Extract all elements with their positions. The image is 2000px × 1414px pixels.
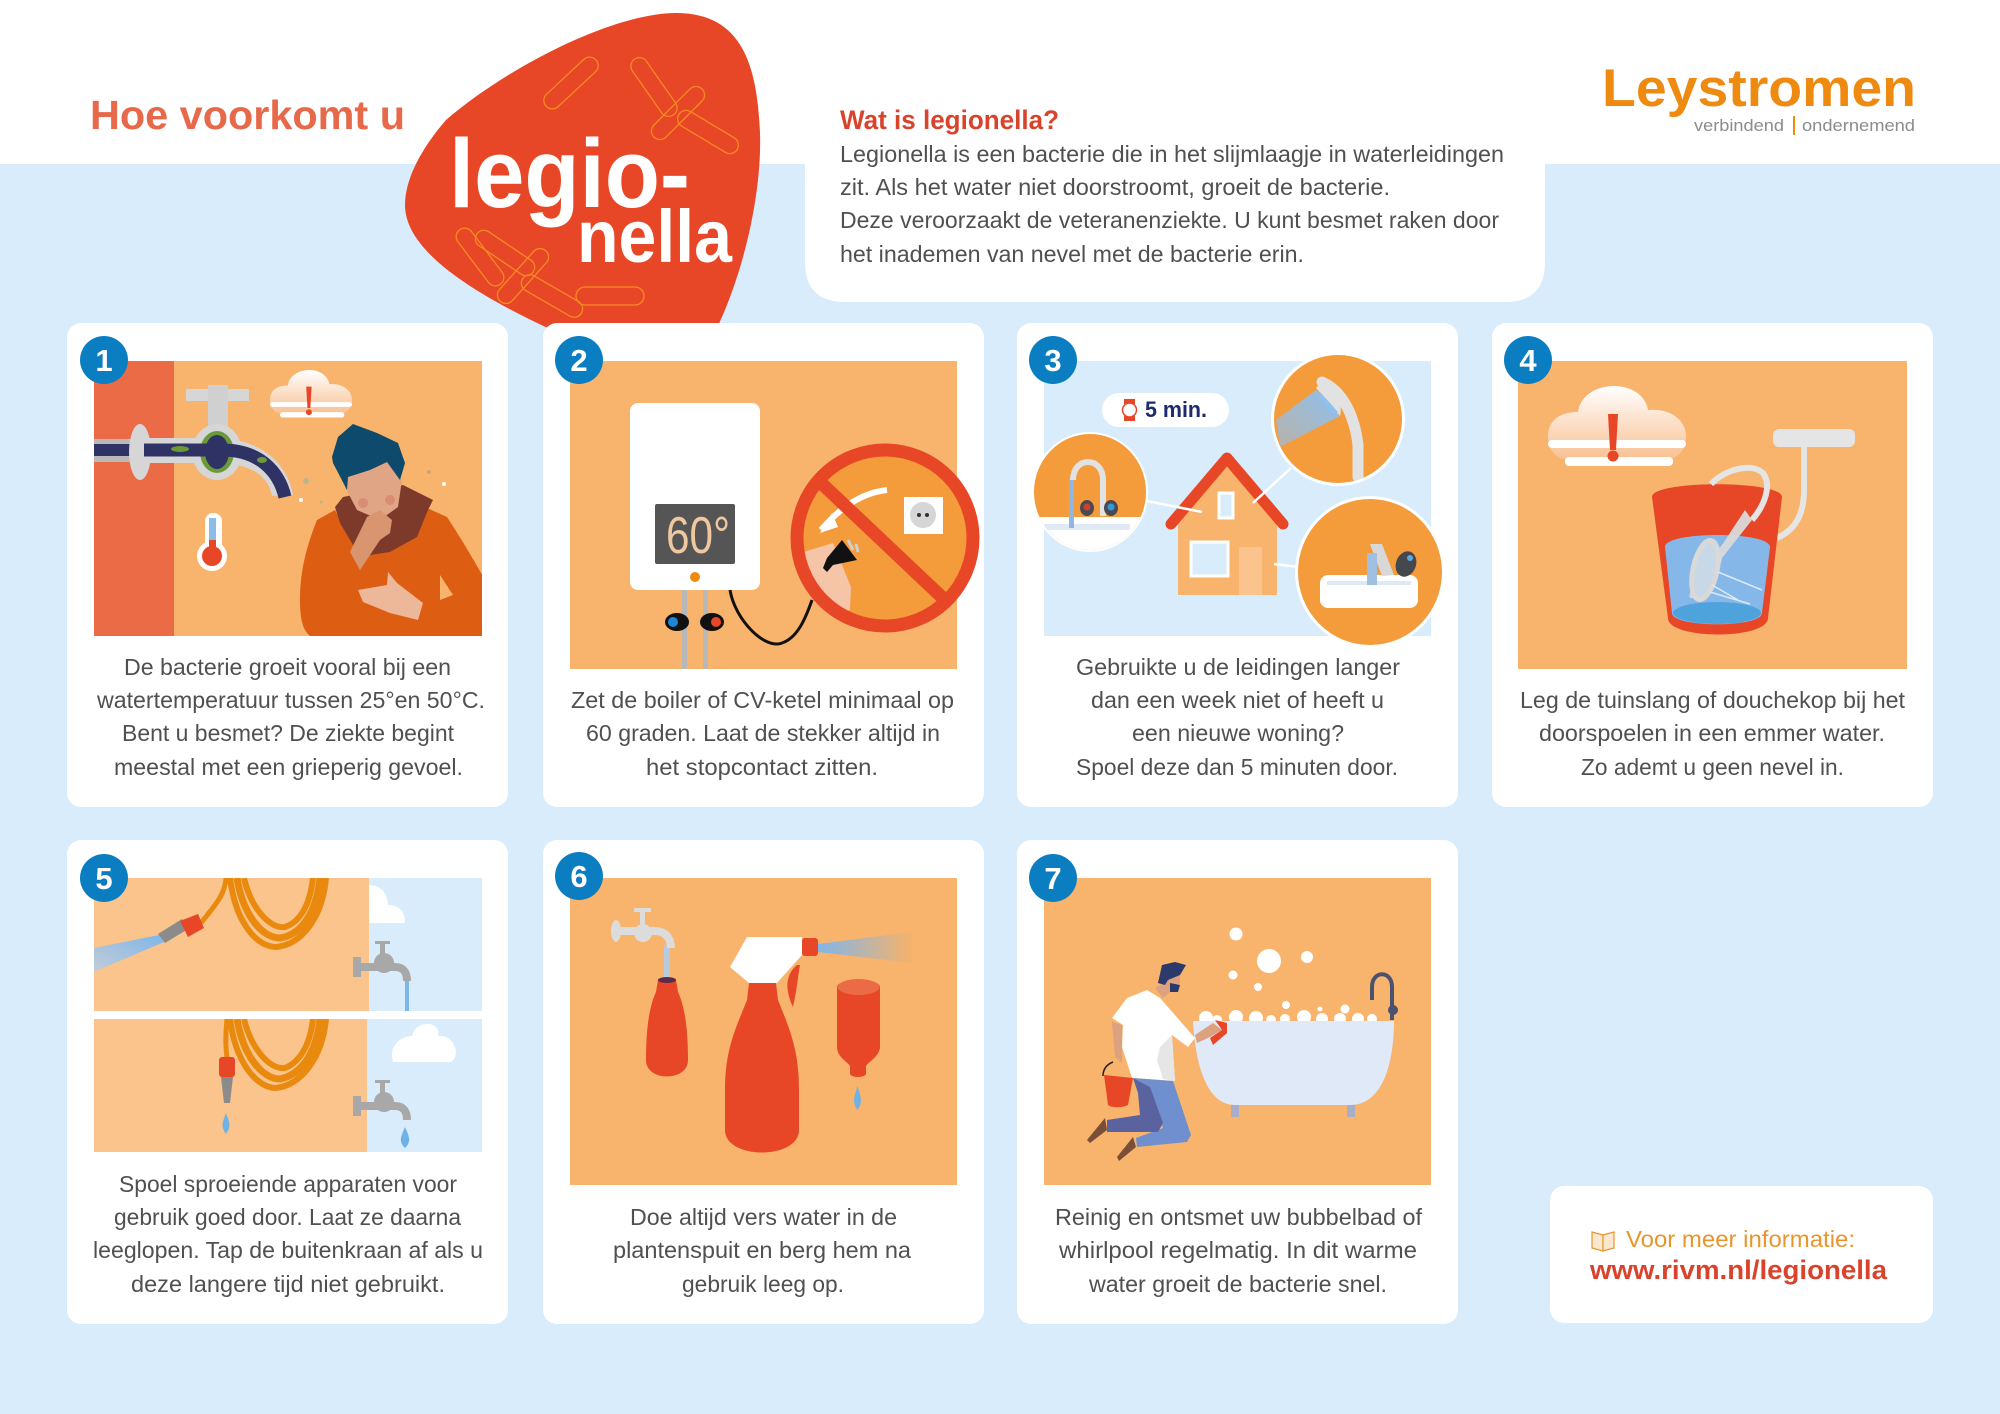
title: Hoe voorkomt u: Hoe voorkomt u bbox=[90, 92, 405, 138]
title blob: legionella: legio- bbox=[449, 119, 690, 228]
text: step 6: Doe altijd vers water in de bbox=[630, 1204, 897, 1230]
intro panel: Wat is legionella: Legionella is een bacterie die in het slijmlaagje in waterleidingen bbox=[840, 141, 1504, 167]
text: step 2: het stopcontact zitten. bbox=[646, 754, 878, 780]
intro panel: Wat is legionella: zit. Als het water niet doorstroomt, groeit de bacterie. bbox=[840, 174, 1390, 200]
text: step 1: watertemperatuur tussen 25°en 50°C. bbox=[96, 687, 485, 713]
text: step 4: Zo ademt u geen nevel in. bbox=[1581, 754, 1844, 780]
number badge 1 bbox=[80, 336, 128, 384]
panel: step 6 bbox=[543, 840, 984, 1324]
number badge 7: 7 bbox=[1044, 861, 1062, 896]
text: step 3: Gebruikte u de leidingen langer bbox=[1076, 654, 1400, 680]
panel: step 2 bbox=[543, 323, 984, 807]
number badge 6: 6 bbox=[570, 859, 588, 894]
text: step 6: gebruik leeg op. bbox=[682, 1271, 844, 1297]
logo: Leystromen: Leystromen bbox=[1602, 59, 1916, 118]
illustration: man cleaning bubble bath bbox=[1044, 878, 1431, 1185]
text: step 3 bbox=[1076, 654, 1400, 780]
text: step 7: Reinig en ontsmet uw bubbelbad of bbox=[1055, 1204, 1422, 1230]
text: step 1: meestal met een grieperig gevoel. bbox=[114, 754, 463, 780]
intro panel: Wat is legionella: Wat is legionella? bbox=[840, 105, 1059, 135]
text: step 6: plantenspuit en berg hem na bbox=[613, 1237, 912, 1263]
icon: thermometer bbox=[197, 513, 227, 571]
text: step 2: Zet de boiler of CV-ketel minimaal op bbox=[571, 687, 954, 713]
text: step 1: De bacterie groeit vooral bij een bbox=[124, 654, 451, 680]
text: step 5: Spoel sproeiende apparaten voor bbox=[119, 1171, 457, 1197]
text: step 4: doorspoelen in een emmer water. bbox=[1539, 720, 1885, 746]
panel: step 7 bbox=[1017, 840, 1458, 1324]
number badge 5: 5 bbox=[95, 861, 113, 896]
illustration: contaminated tap and coughing person bbox=[94, 361, 485, 636]
text: step 5 bbox=[93, 1171, 483, 1297]
illustration: hose draining with tap bbox=[94, 1019, 482, 1152]
panel: step 5 bbox=[67, 840, 508, 1324]
illustration: boiler at 60 degrees: 60° bbox=[666, 507, 730, 565]
intro panel: Wat is legionella bbox=[805, 105, 1545, 302]
intro panel: Wat is legionella: Deze veroorzaakt de veteranenziekte. U kunt besmet raken door bbox=[840, 207, 1499, 233]
panel: step 4 bbox=[1492, 323, 1933, 807]
number badge 1: 1 bbox=[95, 343, 113, 378]
panel: more information bbox=[1550, 1186, 1933, 1323]
text: step 7: whirlpool regelmatig. In dit warme bbox=[1058, 1237, 1417, 1263]
illustration: house with taps bbox=[1030, 352, 1445, 648]
number badge 3: 3 bbox=[1044, 343, 1062, 378]
text: step 2 bbox=[571, 687, 954, 780]
text: step 4 bbox=[1520, 687, 1905, 780]
text: step 7: water groeit de bacterie snel. bbox=[1088, 1271, 1387, 1297]
number badge 6 bbox=[555, 852, 603, 900]
number badge 4 bbox=[1504, 336, 1552, 384]
number badge 3 bbox=[1029, 336, 1077, 384]
text: step 5: leeglopen. Tap de buitenkraan af als u bbox=[93, 1237, 483, 1263]
illustration: plant sprayers bbox=[570, 878, 957, 1185]
text: step 1: Bent u besmet? De ziekte begint bbox=[122, 720, 454, 746]
text: step 4: Leg de tuinslang of douchekop bij het bbox=[1520, 687, 1905, 713]
number badge 7 bbox=[1029, 854, 1077, 902]
number badge 2 bbox=[555, 336, 603, 384]
panel: step 3 bbox=[1017, 323, 1458, 807]
illustration: hose spraying with tap bbox=[94, 878, 482, 1011]
number badge 4: 4 bbox=[1519, 343, 1537, 378]
text: step 7 bbox=[1055, 1204, 1422, 1297]
title blob: legionella bbox=[405, 13, 760, 330]
panel: more information: Voor meer informatie: bbox=[1626, 1226, 1855, 1252]
intro panel: Wat is legionella: het inademen van nevel met de bacterie erin. bbox=[840, 241, 1304, 267]
text: step 3: dan een week niet of heeft u bbox=[1091, 687, 1384, 713]
icon: warning cloud bbox=[1548, 386, 1686, 466]
text: step 1 bbox=[96, 654, 485, 780]
panel: step 1 bbox=[67, 323, 508, 807]
illustration: bucket with shower head bbox=[1518, 361, 1907, 669]
logo: Leystromen: verbindend bbox=[1694, 116, 1784, 135]
text: step 5: gebruik goed door. Laat ze daarna bbox=[114, 1204, 462, 1230]
icon: book bbox=[1592, 1232, 1614, 1251]
illustration: house with taps: 5 min. bbox=[1145, 397, 1207, 422]
text: step 2: 60 graden. Laat de stekker altijd in bbox=[586, 720, 940, 746]
icon: warning cloud bbox=[270, 370, 352, 418]
number badge 2: 2 bbox=[570, 343, 588, 378]
illustration: boiler at 60 degrees bbox=[570, 361, 973, 669]
title blob: legionella: nella bbox=[577, 195, 733, 278]
text: step 3: een nieuwe woning? bbox=[1132, 720, 1344, 746]
number badge 5 bbox=[80, 854, 128, 902]
text: step 5: deze langere tijd niet gebruikt. bbox=[131, 1271, 445, 1297]
text: step 3: Spoel deze dan 5 minuten door. bbox=[1076, 754, 1398, 780]
panel: more information: www.rivm.nl/legionella bbox=[1589, 1255, 1888, 1285]
text: step 6 bbox=[613, 1204, 912, 1297]
logo: Leystromen: ondernemend bbox=[1802, 116, 1915, 135]
